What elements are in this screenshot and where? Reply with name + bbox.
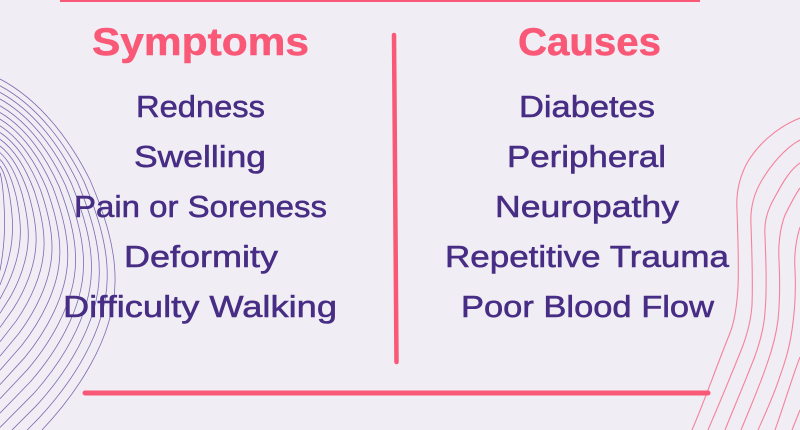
causes list: Diabetes (519, 89, 655, 124)
centre divider (394, 35, 396, 362)
bottom rule (85, 390, 708, 396)
symptoms list: Redness (136, 89, 265, 124)
decoration: left contour lines (0, 79, 115, 430)
symptoms list: Swelling (134, 139, 266, 174)
symptoms list: Deformity (124, 239, 279, 274)
causes list: Poor Blood Flow (461, 289, 715, 324)
symptoms list: Pain or Soreness (74, 189, 327, 224)
causes list (445, 89, 730, 324)
top rule (60, 0, 700, 2)
heading: Causes: Causes (518, 21, 661, 64)
causes list: Peripheral (507, 139, 666, 174)
decoration: right contour lines (692, 118, 800, 430)
symptoms list: Difficulty Walking (63, 289, 337, 324)
heading: Symptoms: Symptoms (92, 21, 309, 64)
causes list: Neuropathy (495, 189, 680, 224)
symptoms list (63, 89, 337, 324)
causes list: Repetitive Trauma (445, 239, 730, 274)
